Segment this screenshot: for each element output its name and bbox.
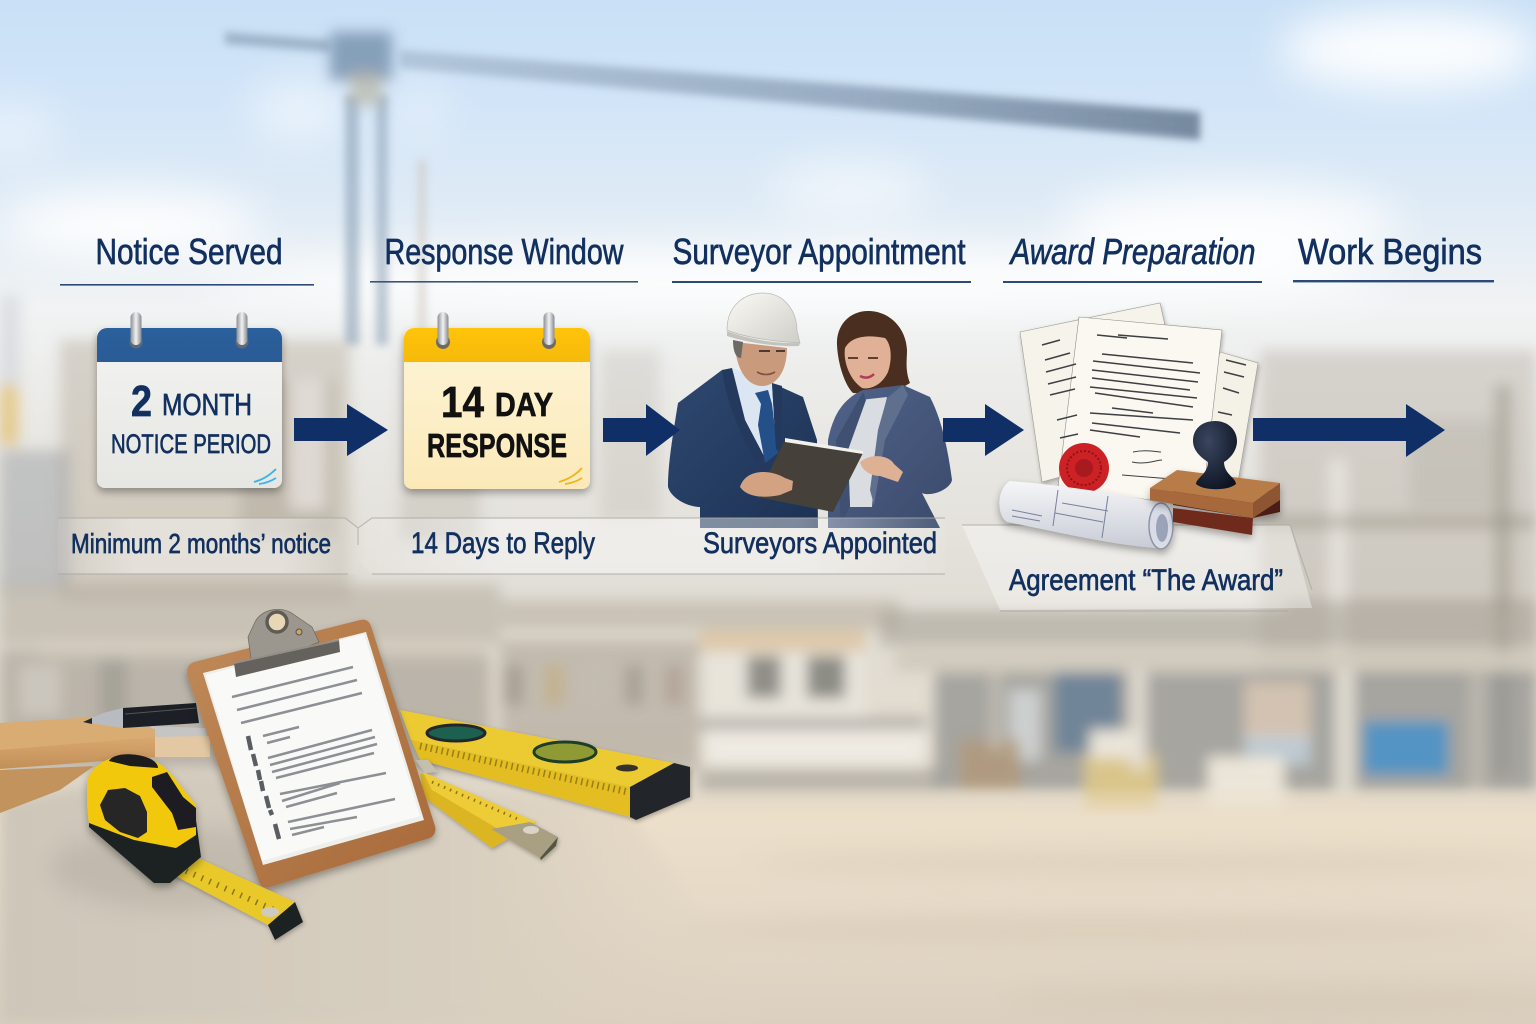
illustration: surveying tools on timber <box>0 609 690 940</box>
icon: blue calendar, 2 month notice period: 2 <box>131 377 152 426</box>
arrow 3 <box>943 404 1024 456</box>
icon: yellow calendar, 14 day response: RESPONSE <box>427 427 567 464</box>
illustration: two surveyors with clipboard <box>668 293 952 528</box>
heading: Notice Served: Notice Served <box>96 231 282 272</box>
concrete under tools <box>0 770 780 1024</box>
tape measure <box>87 754 303 940</box>
caption: Surveyors Appointed: Surveyors Appointed <box>703 527 937 560</box>
pen <box>83 703 199 728</box>
icon: blue calendar, 2 month notice period: NOTICE PERIOD <box>111 429 271 459</box>
clipboard with checklist <box>187 609 435 887</box>
icon: yellow calendar, 14 day response: DAY <box>495 386 553 423</box>
man <box>668 293 818 528</box>
folding rule <box>415 760 558 860</box>
spirit level <box>400 710 690 820</box>
arrow 1 <box>294 404 388 456</box>
clouds <box>0 12 1536 310</box>
man's hand <box>740 472 793 497</box>
stamp <box>1150 470 1280 535</box>
caption bands <box>58 518 1312 611</box>
caption: 14 Days to Reply: 14 Days to Reply <box>411 527 595 560</box>
timber <box>0 717 210 813</box>
icon: blue calendar, 2 month notice period: MONTH <box>162 387 252 422</box>
icon: yellow calendar, 14 day response <box>404 312 590 489</box>
arrow 4: to work begins <box>1253 404 1445 457</box>
heading: Response Window: Response Window <box>384 231 624 272</box>
near buildings <box>0 585 1536 820</box>
woman <box>828 311 952 528</box>
illustration: award documents, seal, stamp and scroll <box>999 303 1280 549</box>
scroll <box>999 481 1173 549</box>
far buildings <box>0 295 1536 780</box>
caption: Agreement The Award: Agreement “The Award” <box>1009 564 1283 597</box>
crane <box>225 32 1200 345</box>
heading: Work Begins: Work Begins <box>1298 231 1482 272</box>
heading: Surveyor Appointment: Surveyor Appointment <box>672 231 966 272</box>
heading: Award Preparation: Award Preparation <box>1009 231 1256 272</box>
ground <box>0 785 1536 1024</box>
arrow 2 <box>603 404 680 456</box>
icon: blue calendar, 2 month notice period <box>97 312 282 488</box>
clipboard <box>757 440 863 512</box>
caption: Minimum 2 months' notice: Minimum 2 months’ notice <box>71 528 331 559</box>
icon: yellow calendar, 14 day response: 14 <box>441 378 484 427</box>
